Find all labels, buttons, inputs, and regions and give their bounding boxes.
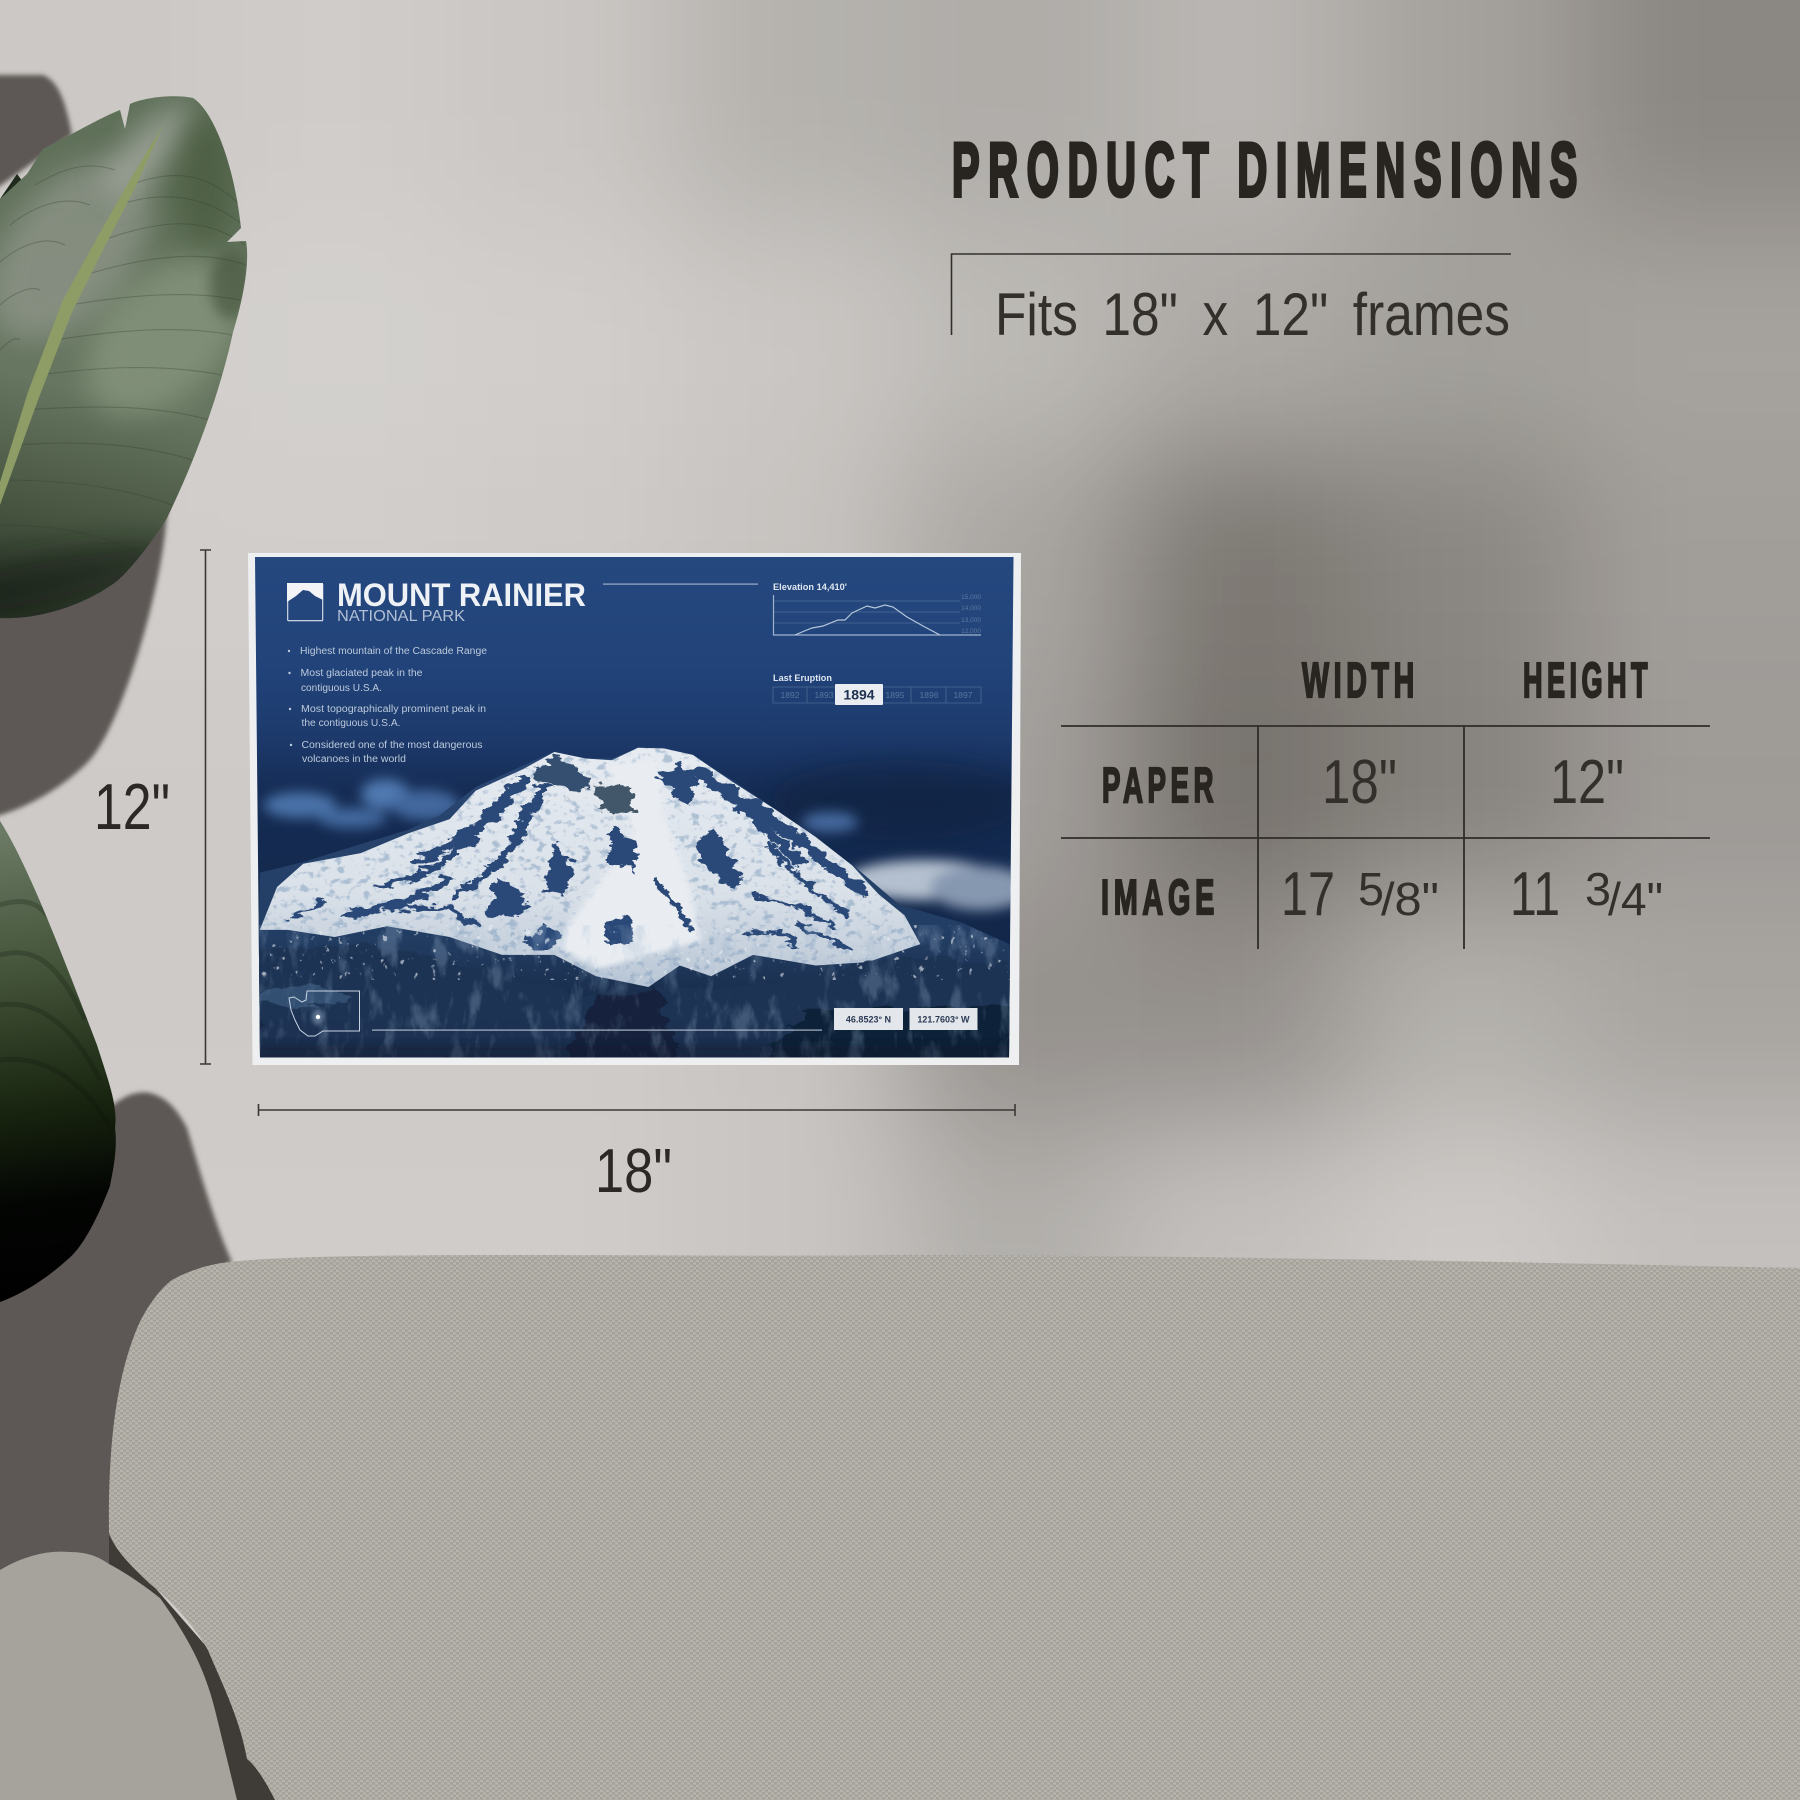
bright central snowfield xyxy=(554,758,701,969)
bullet 3: Most topographically prominent peak in xyxy=(301,704,486,715)
image width value: 17 xyxy=(1281,860,1335,929)
image width value: 5 xyxy=(1358,863,1384,915)
leaf midrib xyxy=(0,125,163,505)
plant shadows on wall xyxy=(0,75,232,1600)
bullet 4 xyxy=(290,740,482,765)
upper plant leaf xyxy=(0,96,248,618)
washington state locator map xyxy=(289,991,360,1036)
height dimension label: 12" xyxy=(94,770,170,843)
frame note xyxy=(952,254,1511,348)
dimensions table xyxy=(1061,654,1710,949)
longitude badge xyxy=(910,1008,978,1030)
bullet 2: contiguous U.S.A. xyxy=(301,683,382,694)
eruption label: Last Eruption xyxy=(773,673,832,684)
highlighted year xyxy=(835,684,883,705)
height dimension line xyxy=(200,550,211,1064)
highlighted year: 1894 xyxy=(843,686,875,702)
poster logo xyxy=(287,583,323,621)
elevation axis labels: 14,000 xyxy=(961,605,981,612)
lower slopes xyxy=(256,946,1014,1062)
elevation axis labels: 13,000 xyxy=(961,617,981,624)
lower slope texture xyxy=(250,925,1020,1060)
image width value: /8" xyxy=(1381,873,1439,925)
last eruption timeline: 1895 xyxy=(886,690,905,700)
row header: paper: PAPER xyxy=(1102,759,1218,813)
paper width value: 18" xyxy=(1322,748,1397,817)
latitude badge xyxy=(834,1008,903,1030)
poster bullet list xyxy=(288,646,487,765)
last eruption timeline xyxy=(773,673,981,705)
lower plant leaf xyxy=(0,821,116,1302)
elevation axis labels xyxy=(961,594,981,635)
last eruption timeline: 1896 xyxy=(920,690,939,700)
leaf veins xyxy=(0,166,246,506)
bullet 2 xyxy=(288,668,423,694)
elevation axis labels: 15,000 xyxy=(961,594,981,601)
bullet 4: volcanoes in the world xyxy=(302,754,406,765)
column header: height: HEIGHT xyxy=(1523,654,1652,708)
elevation label: Elevation 14,410' xyxy=(773,582,847,593)
snow mottling xyxy=(262,748,918,986)
mountain xyxy=(256,748,1014,1062)
last eruption timeline: 1897 xyxy=(954,690,973,700)
poster title: MOUNT RAINIER xyxy=(337,577,586,613)
elevation profile xyxy=(795,605,940,635)
bullet 4: Considered one of the most dangerous xyxy=(302,740,482,751)
elevation axis labels: 12,000 xyxy=(961,628,981,635)
last eruption timeline: 1893 xyxy=(815,690,834,700)
image width value xyxy=(1281,860,1439,929)
paper height value: 12" xyxy=(1550,748,1624,817)
bullet 2: Most glaciated peak in the xyxy=(300,668,423,679)
poster paper xyxy=(248,553,1021,1065)
sofa gap shadow xyxy=(109,1535,300,1800)
bottom rule xyxy=(372,1030,822,1031)
rock patches and ridges xyxy=(293,754,863,951)
sofa back cushion xyxy=(109,1255,1800,1800)
poster xyxy=(248,553,1030,1065)
column header: width: WIDTH xyxy=(1302,654,1419,708)
top rule xyxy=(603,584,758,585)
image height value: 3 xyxy=(1585,863,1611,915)
image height value: /4" xyxy=(1608,873,1663,925)
image height value xyxy=(1510,860,1663,929)
width dimension label: 18" xyxy=(595,1137,672,1206)
poster photo xyxy=(250,555,1030,1062)
clouds xyxy=(264,779,1030,910)
longitude badge: 121.7603° W xyxy=(917,1014,970,1024)
elevation chart xyxy=(773,582,981,635)
bullet 3: the contiguous U.S.A. xyxy=(302,718,400,729)
sofa armrest xyxy=(0,1552,237,1800)
frame note: Fits 18" x 12" frames xyxy=(995,281,1510,348)
last eruption timeline: 1892 xyxy=(781,690,800,700)
bullet 1: Highest mountain of the Cascade Range xyxy=(300,646,487,657)
row header: image: IMAGE xyxy=(1101,871,1219,925)
poster subtitle: NATIONAL PARK xyxy=(337,608,465,625)
image height value: 11 xyxy=(1510,860,1560,929)
width dimension line xyxy=(258,1104,1015,1116)
latitude badge: 46.8523° N xyxy=(846,1014,891,1024)
bullet 3 xyxy=(289,704,486,729)
